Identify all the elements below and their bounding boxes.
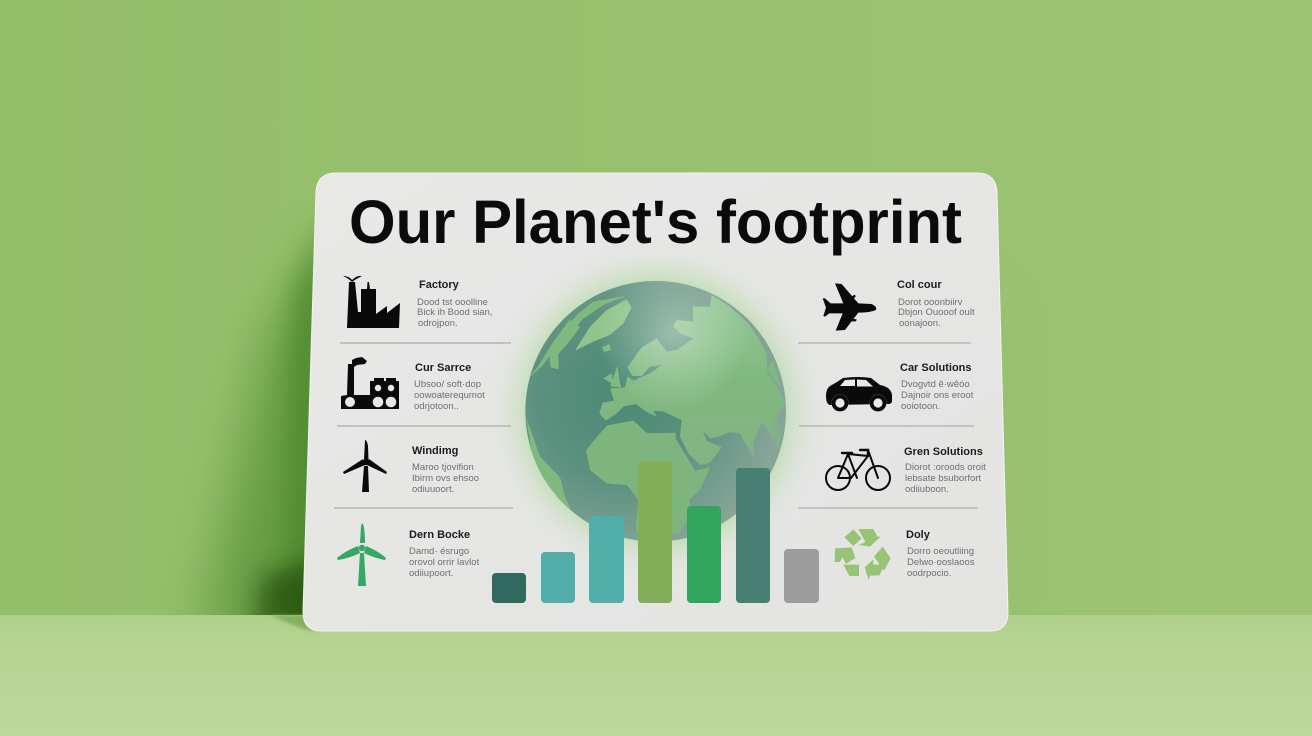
power plant text: oowoaterequmot bbox=[414, 390, 485, 401]
Eurasia bbox=[599, 295, 785, 465]
bar 7 bbox=[784, 549, 819, 603]
bar 3 bbox=[589, 516, 624, 603]
bicycle text: lebsate bsuborfort bbox=[905, 473, 981, 484]
North America bbox=[530, 320, 580, 376]
Africa bbox=[586, 421, 710, 533]
airplane text: Dorot ooonbiirv bbox=[898, 297, 963, 308]
power plant text bbox=[414, 362, 485, 412]
bar 5 bbox=[687, 506, 721, 603]
recycling text: Doly bbox=[906, 529, 931, 541]
British Isles bbox=[603, 366, 622, 387]
factory text: Dood tst ooolline bbox=[417, 297, 488, 308]
bicycle text: Diorot :oroods oroit bbox=[905, 462, 986, 473]
green wind turbine text: odiiupoort. bbox=[409, 568, 453, 579]
power plant text: Ubsoo/ soft·dop bbox=[414, 379, 481, 390]
Arctic islands bbox=[572, 296, 624, 326]
wind turbine text: Ibirm ovs ehsoo bbox=[412, 473, 479, 484]
power plant text: Cur Sarrce bbox=[415, 362, 471, 374]
icon: power plant bbox=[341, 357, 399, 409]
airplane text: Col cour bbox=[897, 279, 942, 291]
car text: Car Solutions bbox=[900, 362, 972, 374]
infographic card bbox=[303, 173, 1008, 631]
airplane text: oonajoon. bbox=[899, 318, 941, 329]
recycling text: Dorro oeoutliing bbox=[907, 546, 974, 557]
Greenland bbox=[575, 299, 632, 351]
recycling text: oodrpocio. bbox=[907, 568, 951, 579]
bar 4 bbox=[638, 461, 672, 603]
icon: wind turbine bbox=[343, 440, 387, 492]
title: Our Planet's footprint bbox=[349, 188, 962, 256]
factory text: Bick ih Bood sian, bbox=[417, 307, 493, 318]
airplane text: Dbjon Ouooof oult bbox=[898, 307, 975, 318]
green wind turbine text: Damd· ésrugo bbox=[409, 546, 469, 557]
icon: factory bbox=[343, 276, 400, 328]
green wind turbine text: orovol orrir lavlot bbox=[409, 557, 480, 568]
South America bbox=[526, 418, 571, 510]
bicycle text bbox=[904, 446, 986, 495]
bar 1 bbox=[492, 573, 526, 603]
wind turbine text: odiuuoort. bbox=[412, 484, 454, 495]
floor shadow bbox=[270, 615, 314, 631]
Japan bbox=[767, 360, 779, 385]
car text bbox=[900, 362, 974, 412]
bar 2 bbox=[541, 552, 575, 603]
bar 6 bbox=[736, 468, 770, 603]
factory text bbox=[417, 279, 493, 329]
airplane text bbox=[897, 279, 975, 329]
bicycle text: odiiuboon. bbox=[905, 484, 949, 495]
factory text: odrojpon. bbox=[418, 318, 458, 329]
car text: Dajnoir ons eroot bbox=[901, 390, 974, 401]
wind turbine text: Windimg bbox=[412, 445, 458, 457]
floor bbox=[0, 615, 1312, 736]
wind turbine text bbox=[412, 445, 479, 495]
recycling text: Delwo·ooslaoos bbox=[907, 557, 975, 568]
Southeast Asia bbox=[770, 413, 782, 450]
recycling text bbox=[906, 529, 975, 579]
icon: recycling arrows bbox=[835, 529, 891, 580]
Iceland bbox=[602, 344, 611, 352]
globe with glow bbox=[502, 242, 810, 563]
card shadow on wall bbox=[184, 218, 892, 615]
car text: ooiotoon. bbox=[901, 401, 940, 412]
wind turbine text: Maroo tjovifion bbox=[412, 462, 474, 473]
green wind turbine text bbox=[409, 529, 480, 579]
icon: green wind turbine bbox=[337, 523, 386, 586]
green wind turbine text: Dern Bocke bbox=[409, 529, 470, 541]
bar chart bbox=[492, 461, 819, 603]
bicycle text: Gren Solutions bbox=[904, 446, 983, 458]
icon: bicycle bbox=[826, 450, 890, 490]
icon: car bbox=[826, 377, 892, 412]
icon: airplane bbox=[823, 283, 876, 331]
car text: Dvogvtd ê·wêóo bbox=[901, 379, 970, 390]
factory text: Factory bbox=[419, 279, 460, 291]
power plant text: odrjotoon.. bbox=[414, 401, 459, 412]
